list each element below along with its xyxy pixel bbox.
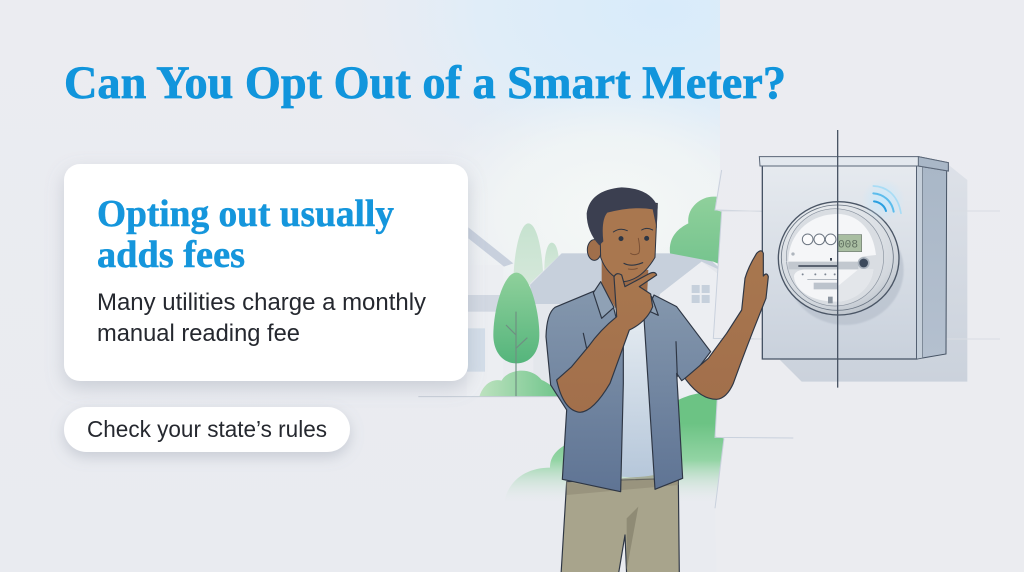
face	[599, 203, 657, 282]
wifi signal icon	[862, 178, 905, 222]
ground bush	[479, 371, 562, 397]
background trees	[513, 223, 559, 285]
forearm and hand on chin	[557, 272, 657, 412]
card body text: Many utilities charge a monthly	[97, 289, 426, 316]
card body text: manual reading fee	[97, 320, 300, 347]
shirt	[546, 282, 711, 492]
front tree	[493, 273, 539, 397]
wall seam lines	[720, 211, 1000, 339]
facial features	[613, 228, 653, 269]
meter shadow	[786, 215, 904, 325]
neck	[602, 260, 648, 310]
card heading	[97, 193, 394, 276]
right house	[530, 253, 723, 397]
ear	[587, 240, 601, 260]
meter dial	[778, 202, 899, 315]
box front	[762, 165, 917, 359]
hair	[587, 187, 658, 245]
top bush	[670, 197, 733, 270]
t-shirt	[622, 315, 654, 477]
left house	[467, 227, 513, 397]
enclosure shadow	[780, 163, 967, 382]
trousers	[561, 478, 679, 572]
man	[546, 187, 768, 572]
box side	[917, 166, 947, 359]
meter small dials	[802, 234, 836, 245]
house wall siding	[713, 0, 1024, 572]
meter LCD display: 008	[838, 239, 858, 251]
panel: fee callout card	[64, 164, 468, 381]
box lid	[759, 157, 948, 171]
pill: check state rules	[64, 407, 350, 452]
card heading: Opting out usually	[97, 193, 394, 235]
card heading: adds fees	[97, 234, 245, 276]
smart meter enclosure	[720, 130, 1000, 388]
foreground bush	[503, 392, 727, 507]
neighbourhood scene	[418, 197, 733, 507]
house window	[692, 285, 710, 303]
title: Can You Opt Out of a Smart Meter?	[64, 57, 786, 109]
center vertical line	[836, 130, 840, 388]
sky	[200, 0, 730, 350]
ground line	[418, 395, 567, 398]
pill: check state rules: Check your state’s rules	[87, 416, 327, 442]
card body text	[97, 289, 426, 347]
raised arm	[685, 251, 768, 399]
